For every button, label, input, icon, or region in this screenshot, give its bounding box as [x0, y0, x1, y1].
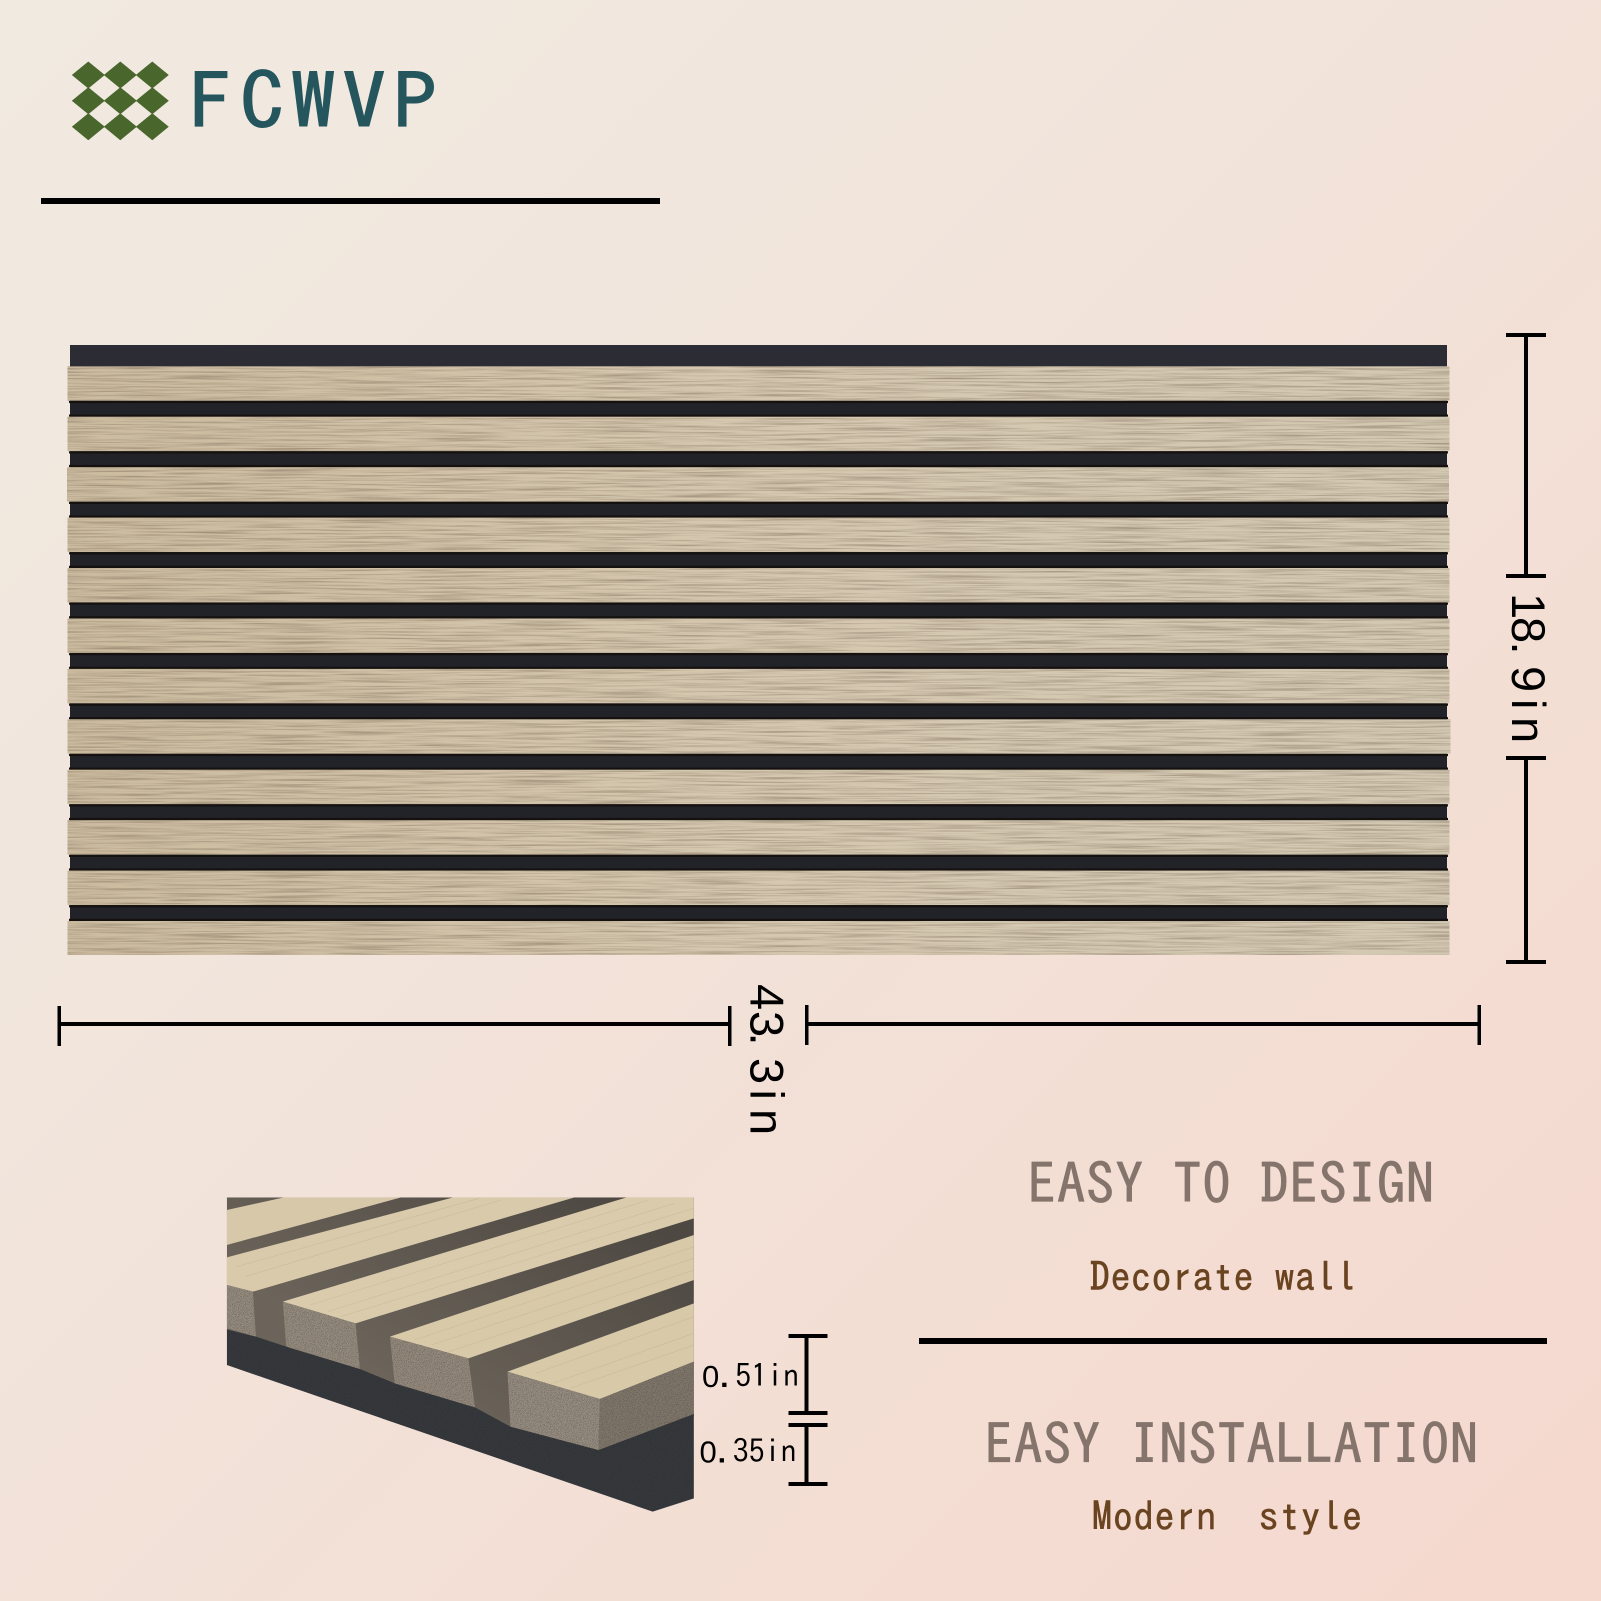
label: 0.35in: 0.35in	[700, 1434, 796, 1470]
label: 0.51in: 0.51in	[702, 1359, 799, 1394]
dimension: slat thickness 0.51in	[702, 1334, 828, 1415]
felt base board	[227, 1329, 694, 1512]
heading: EASY TO DESIGN	[1028, 1155, 1434, 1211]
icon: green diamond grid	[72, 62, 169, 140]
label: 43.3in: 43.3in	[740, 984, 794, 1135]
slat shadows	[69, 402, 1448, 920]
subheading: Modern style	[1092, 1496, 1362, 1536]
slat B	[227, 1197, 575, 1337]
slat E	[507, 1303, 694, 1450]
dimension: backing thickness 0.35in	[700, 1423, 828, 1486]
subheading: Decorate wall	[1090, 1256, 1356, 1296]
wood grain strokes	[236, 1198, 694, 1388]
slat A top	[227, 1197, 401, 1245]
slat 8	[68, 719, 1450, 754]
dark felt backing	[70, 345, 1447, 935]
slat 12	[68, 921, 1450, 955]
slat 4	[68, 518, 1450, 552]
dimension: panel width 43.3in	[58, 984, 1481, 1135]
slat 7	[68, 669, 1450, 703]
photo: slat close-up	[227, 1197, 694, 1512]
text block: easy installation	[985, 1416, 1478, 1536]
panel: wood slat acoustic panel	[67, 345, 1450, 955]
header rule	[41, 198, 660, 204]
brand name: FCWVP	[189, 62, 437, 140]
slat 5	[68, 568, 1450, 602]
slat 11	[68, 871, 1450, 905]
slat 1	[68, 366, 1450, 401]
heading: EASY INSTALLATION	[985, 1416, 1478, 1472]
slat D	[390, 1235, 694, 1407]
dimension: panel height 18.9in	[1502, 333, 1555, 964]
recessed channels	[227, 1197, 694, 1453]
slat 3	[67, 467, 1449, 502]
slat 10	[68, 820, 1450, 855]
slat 2	[68, 417, 1450, 451]
slat C	[283, 1197, 694, 1369]
logo: FCWVP	[72, 62, 437, 140]
text block: easy to design	[1028, 1155, 1434, 1296]
divider	[919, 1338, 1547, 1344]
slat 6	[68, 618, 1450, 653]
label: 18.9in: 18.9in	[1502, 593, 1555, 743]
slat 9	[68, 770, 1450, 804]
top felt band	[70, 345, 1447, 366]
